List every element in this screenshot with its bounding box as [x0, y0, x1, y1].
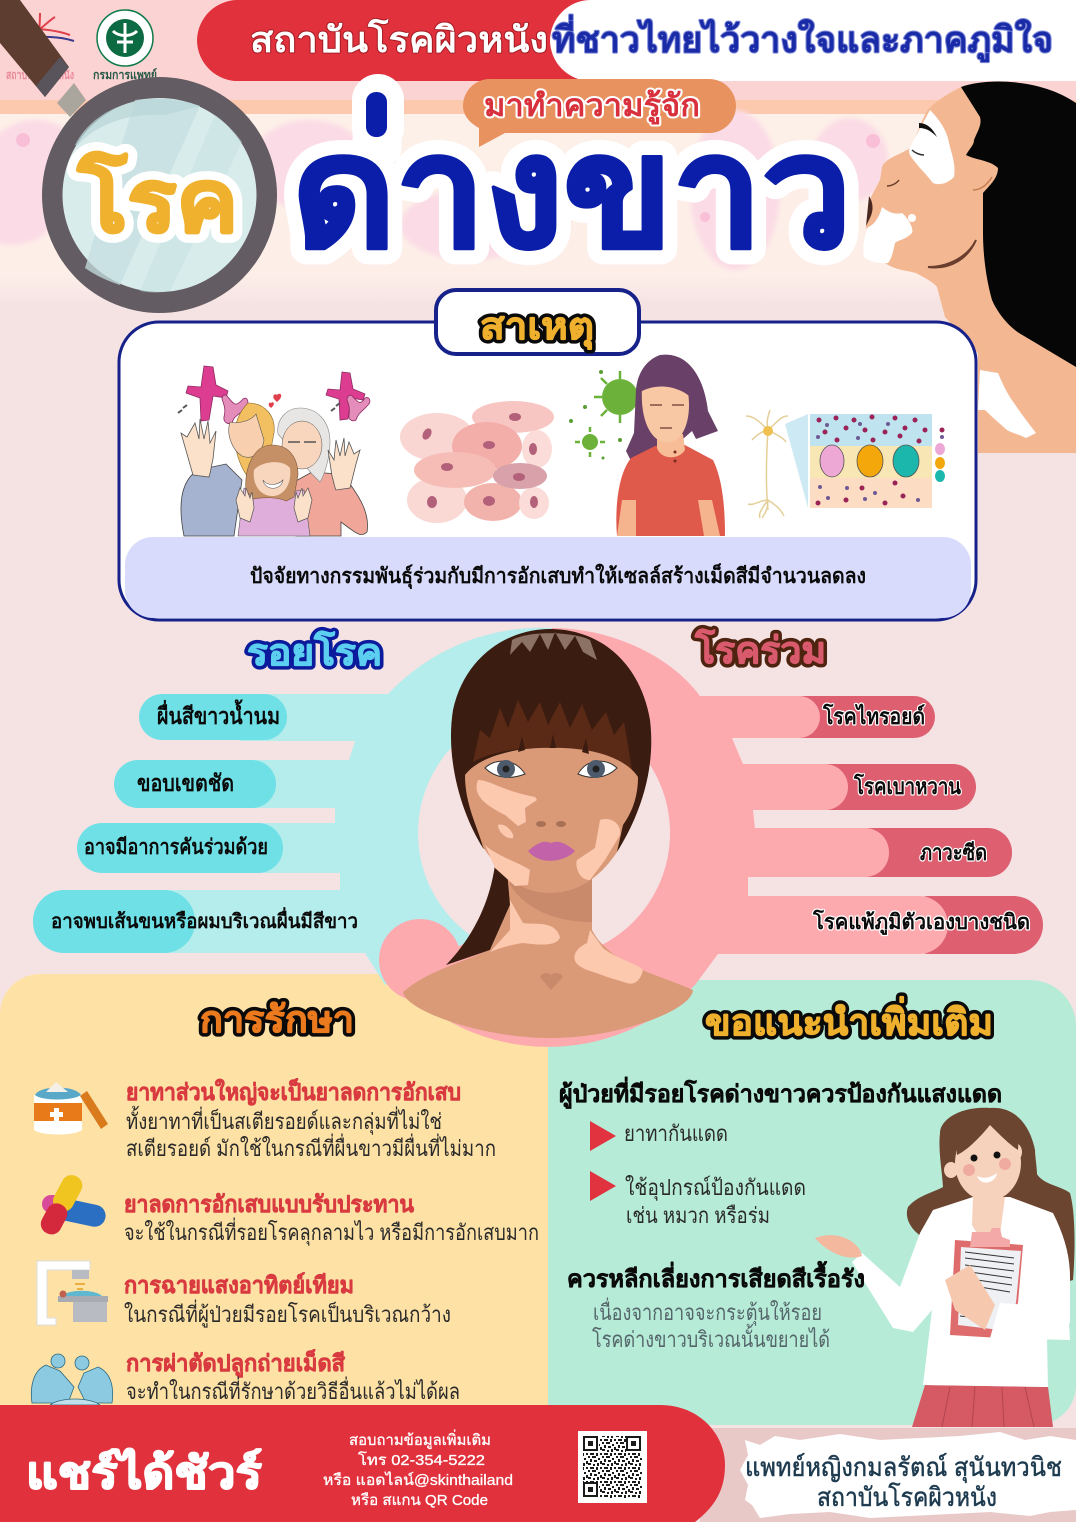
eyes: [485, 760, 617, 778]
treatment 1: topical: ทั้งยาทาที่เป็นสเตียรอยด์และกลุ่มที่ไม่ใช่: [126, 1106, 442, 1135]
symptom pill 2: [114, 760, 276, 808]
comorbidity bar 3: [740, 828, 1012, 877]
illustration: woman with vitiligo: [403, 629, 693, 1038]
advice: sun protection: ยาทากันแดด: [624, 1121, 728, 1146]
treatment 3: phototherapy: ในกรณีที่ผู้ป่วยมีรอยโรคเป็นบริเวณกว้าง: [124, 1299, 451, 1328]
icon: cream jar: [34, 1082, 108, 1134]
arrow: bullet 2: [590, 1171, 616, 1201]
treatment 3: phototherapy: [37, 1261, 451, 1328]
QR code: [578, 1431, 647, 1503]
advice: sun protection: [559, 1076, 1002, 1228]
symptom pill 1: [139, 694, 287, 740]
heading: treatment: การรักษา: [200, 999, 354, 1040]
footer: red share band: [0, 1405, 725, 1522]
title chip: get to know: มาทำความรู้จัก: [484, 88, 700, 125]
logo: Institute of Dermatology: สถาบันโรคผิวหนัง: [6, 67, 74, 82]
treatment 4: surgery: การผ่าตัดปลูกถ่ายเม็ดสี: [126, 1348, 346, 1378]
treatment 4: surgery: [31, 1348, 460, 1405]
advice: sun protection: ผู้ป่วยที่มีรอยโรคด่างขาวควรป้องกันแสงแดด: [559, 1076, 1002, 1109]
advice: avoid friction: เนื่องจากอาจจะกระตุ้นให้รอย: [593, 1297, 822, 1326]
advice: sun protection: ใช้อุปกรณ์ป้องกันแดด: [625, 1175, 806, 1201]
heading tab: causes: สาเหตุ: [480, 306, 594, 350]
heading tab: causes: สาเหตุ: [480, 306, 594, 350]
heading: comorbidities: โรคร่วม: [694, 628, 826, 671]
icon: magnifying glass: โรค: [77, 151, 238, 250]
logo: Department of Medical Services: [93, 10, 157, 82]
illustration: nerve and melanocyte membrane: [746, 410, 945, 518]
inner circle: [418, 707, 670, 959]
arrow: bullet 1: [590, 1121, 616, 1151]
comorbidity bar 4: โรคแพ้ภูมิตัวเองบางชนิด: [812, 909, 1030, 936]
comorbidity bar 1: [700, 696, 935, 738]
comorbidity bar 4: [760, 896, 1043, 954]
illustration: family with chromosomes: [178, 366, 370, 536]
treatment 2: oral: ยาลดการอักเสบแบบรับประทาน: [124, 1191, 414, 1217]
panel: causes: [119, 322, 976, 620]
illustration: sick woman with virus: [569, 355, 725, 536]
comorbidities branches: [379, 628, 1043, 1047]
icon: phototherapy machine: [37, 1261, 108, 1325]
contact information: หรือ สแกน QR Code: [351, 1492, 488, 1509]
header banner: ที่ชาวไทยไว้วางใจและภาคภูมิใจ: [552, 14, 1053, 63]
comorbidity bar 3: ภาวะซีด: [920, 840, 987, 865]
contact information: [323, 1429, 513, 1509]
treatment 4: surgery: จะทำในกรณีที่รักษาด้วยวิธีอื่นแล้วไม่ได้ผล: [126, 1376, 460, 1404]
icon: capsules: [37, 1172, 108, 1238]
causes explanation box: ปัจจัยทางกรรมพันธุ์ร่วมกับมีการอักเสบทำให้เซลล์สร้างเม็ดสีมีจำนวนลดลง: [250, 562, 866, 590]
heading: more advice: ขอแนะนำเพิ่มเติม: [705, 996, 993, 1043]
logo: Department of Medical Services: กรมการแพทย์: [93, 68, 157, 82]
treatment 1: topical: [34, 1077, 496, 1161]
header banner: [197, 0, 1076, 81]
symptom pill 2: ขอบเขตชัด: [137, 770, 234, 796]
title chip: get to know: [463, 79, 736, 147]
illustration: woman profile with vitiligo: [863, 82, 1076, 453]
advice: sun protection: เช่น หมวก หรือร่ม: [626, 1203, 770, 1228]
heading: comorbidities: โรคร่วม: [694, 628, 826, 671]
treatment 2: oral: [37, 1172, 539, 1246]
advice: avoid friction: [567, 1260, 865, 1352]
icon: magnifying glass: [0, 0, 277, 313]
comorbidity bar 1: โรคไทรอยด์: [822, 703, 925, 729]
illustration: doctor: [815, 1108, 1075, 1427]
symptom pill 3: [77, 823, 283, 873]
footer: doctor credit: สถาบันโรคผิวหนัง: [817, 1482, 997, 1512]
icon: surgeons: [31, 1354, 113, 1405]
treatment 2: oral: จะใช้ในกรณีที่รอยโรคลุกลามไว หรือมีการอักเสบมาก: [124, 1217, 539, 1246]
lips: [528, 842, 575, 861]
symptom pill 1: ผื่นสีขาวน้ำนม: [157, 699, 280, 729]
title: vitiligo: ด่างขาว: [292, 106, 852, 280]
causes explanation box: [125, 537, 971, 618]
header banner: สถาบันโรคผิวหนัง: [250, 18, 548, 60]
panel: treatment background: [0, 974, 560, 1405]
contact information: หรือ แอดไลน์@skinthailand: [323, 1471, 513, 1489]
comorbidity bar 2: [720, 764, 976, 810]
illustration: skin cells: [400, 401, 554, 523]
advice: avoid friction: ควรหลีกเลี่ยงการเสียดสีเรื้อรัง: [567, 1260, 865, 1293]
title: vitiligo: ด่างขาว: [292, 106, 852, 280]
heading: more advice: ขอแนะนำเพิ่มเติม: [705, 996, 993, 1043]
symptom pill 4: [33, 890, 358, 953]
symptom pill 4: อาจพบเส้นขนหรือผมบริเวณผื่นมีสีขาว: [51, 906, 358, 933]
heading tab: causes: [436, 290, 639, 354]
logo: Institute of Dermatology: [5, 13, 74, 82]
panel: advice background: [548, 980, 1076, 1425]
icon: magnifying glass: โรค: [77, 151, 238, 250]
treatment 1: topical: สเตียรอยด์ มักใช้ในกรณีที่ผื่นขาวมีผื่นที่ไม่มาก: [126, 1133, 496, 1161]
symptoms branches: [33, 628, 552, 985]
top skin-layer backdrop: [0, 0, 1076, 304]
footer right background: [700, 1428, 1076, 1522]
symptom pill 3: อาจมีอาการคันร่วมด้วย: [84, 835, 268, 859]
contact information: สอบถามข้อมูลเพิ่มเติม: [349, 1429, 491, 1449]
footer: red share band: แชร์ได้ชัวร์: [26, 1447, 262, 1498]
footer: doctor credit: [740, 1432, 1076, 1518]
heading: symptoms: รอยโรค: [247, 630, 382, 673]
contact information: โทร 02-354-5222: [358, 1451, 485, 1469]
heading: treatment: การรักษา: [200, 999, 354, 1040]
heading: symptoms: รอยโรค: [247, 630, 382, 673]
treatment 3: phototherapy: การฉายแสงอาทิตย์เทียม: [124, 1272, 354, 1298]
treatment 1: topical: ยาทาส่วนใหญ่จะเป็นยาลดการอักเสบ: [126, 1077, 461, 1106]
advice: avoid friction: โรคด่างขาวบริเวณนั้นขยายได้: [592, 1324, 830, 1352]
comorbidity bar 2: โรคเบาหวาน: [853, 773, 961, 799]
